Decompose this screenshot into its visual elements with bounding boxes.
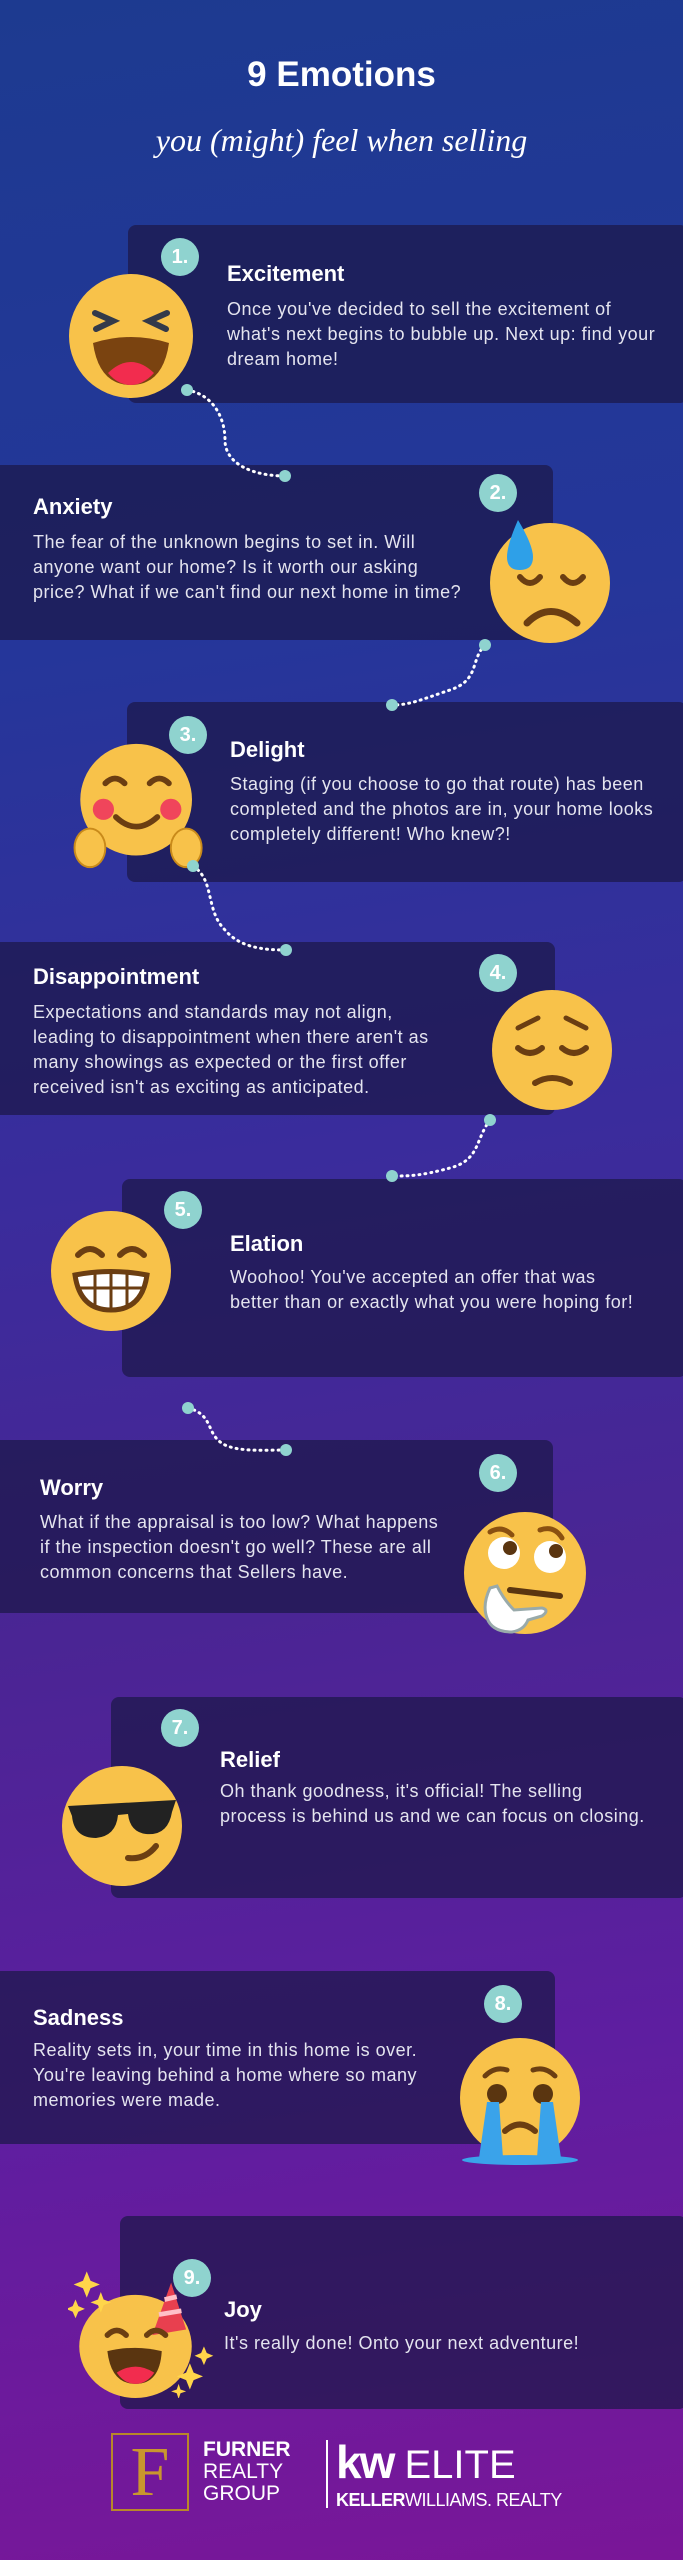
text: worry: if the inspection doesn't go well? These are all bbox=[40, 1537, 431, 1557]
text: sadness bbox=[33, 2040, 417, 2110]
text: excitement: Once you've decided to sell the excitement of bbox=[227, 299, 611, 319]
logo: Furner Realty Group: GROUP bbox=[203, 2482, 280, 2505]
badge 3 bbox=[169, 716, 207, 754]
text: excitement: dream home! bbox=[227, 349, 339, 369]
logo: Furner Realty Group: F bbox=[131, 2434, 169, 2511]
text: elation bbox=[230, 1267, 633, 1312]
icon: sunglasses face bbox=[62, 1766, 182, 1886]
title: 9 Emotions bbox=[247, 55, 436, 94]
badge 2: 2. bbox=[490, 482, 506, 504]
subtitle: you (might) feel when selling bbox=[156, 122, 527, 158]
text: delight bbox=[230, 774, 653, 844]
badge 6: 6. bbox=[490, 1462, 506, 1484]
panel: disappointment bbox=[0, 942, 555, 1115]
badge 6 bbox=[479, 1454, 517, 1492]
panel: worry bbox=[0, 1440, 553, 1613]
badge 1 bbox=[161, 238, 199, 276]
heading: Delight: Delight bbox=[230, 737, 305, 762]
icon: party face bbox=[68, 2272, 214, 2398]
heading: Elation: Elation bbox=[230, 1231, 303, 1256]
logo: KW Elite: kw ELITE bbox=[336, 2436, 516, 2488]
panel: relief bbox=[111, 1697, 683, 1898]
logo: KW Elite: KELLERWILLIAMS. REALTY bbox=[336, 2490, 562, 2510]
text: sadness: Reality sets in, your time in this home is over. bbox=[33, 2040, 417, 2060]
panel: excitement bbox=[128, 225, 683, 403]
icon: crying face bbox=[460, 2038, 580, 2165]
badge 9: 9. bbox=[184, 2267, 200, 2289]
panel: sadness bbox=[0, 1971, 555, 2144]
logo: Furner Realty Group: FURNER bbox=[203, 2438, 290, 2461]
text: delight: completely different! Who knew?! bbox=[230, 824, 511, 844]
badge 5 bbox=[164, 1191, 202, 1229]
logo: Furner Realty Group bbox=[111, 2433, 290, 2511]
icon: grinning face bbox=[51, 1211, 171, 1331]
logo: KW Elite bbox=[336, 2436, 562, 2510]
heading: Worry: Worry bbox=[40, 1475, 103, 1500]
heading: Relief: Relief bbox=[220, 1747, 280, 1772]
text: anxiety: The fear of the unknown begins to set in. Will bbox=[33, 532, 415, 552]
text: excitement bbox=[227, 299, 655, 369]
logo: Furner Realty Group: REALTY bbox=[203, 2460, 283, 2483]
text: delight: Staging (if you choose to go that route) has been bbox=[230, 774, 644, 794]
badge 4: 4. bbox=[490, 962, 506, 984]
heading: Disappointment: Disappointment bbox=[33, 964, 199, 989]
badge 9 bbox=[173, 2259, 211, 2297]
panel: anxiety bbox=[0, 465, 553, 640]
icon: delight face bbox=[74, 744, 203, 868]
text: delight: completed and the photos are in, your home looks bbox=[230, 799, 653, 819]
badge 3: 3. bbox=[180, 724, 196, 746]
text: elation: Woohoo! You've accepted an offer that was bbox=[230, 1267, 596, 1287]
text: anxiety: anyone want our home? Is it worth our asking bbox=[33, 557, 418, 577]
heading: Sadness: Sadness bbox=[33, 2005, 124, 2030]
icon: pensive face bbox=[492, 990, 612, 1110]
divider bbox=[326, 2440, 328, 2508]
badge 5: 5. bbox=[175, 1199, 191, 1221]
text: relief bbox=[220, 1781, 645, 1826]
text: excitement: what's next begins to bubble up. Next up: find your bbox=[227, 324, 655, 344]
icon: thinking face bbox=[464, 1512, 586, 1634]
text: worry: common concerns that Sellers have. bbox=[40, 1562, 348, 1582]
text: anxiety: price? What if we can't find our next home in time? bbox=[33, 582, 461, 602]
text: relief: Oh thank goodness, it's official! The selling bbox=[220, 1781, 582, 1801]
text: worry: What if the appraisal is too low? What happens bbox=[40, 1512, 438, 1532]
badge 7: 7. bbox=[172, 1717, 188, 1739]
badge 4 bbox=[479, 954, 517, 992]
badge 2 bbox=[479, 474, 517, 512]
text: relief: process is behind us and we can focus on closing. bbox=[220, 1806, 645, 1826]
icon: sweat face bbox=[490, 520, 610, 643]
badge 7 bbox=[161, 1709, 199, 1747]
text: disappointment: Expectations and standards may not align, bbox=[33, 1002, 393, 1022]
text: disappointment bbox=[33, 1002, 429, 1097]
text: worry bbox=[40, 1512, 438, 1582]
badge 1: 1. bbox=[172, 246, 188, 268]
badge 8: 8. bbox=[495, 1993, 511, 2015]
heading: Excitement: Excitement bbox=[227, 261, 344, 286]
text: sadness: memories were made. bbox=[33, 2090, 221, 2110]
text: disappointment: many showings as expected or the first offer bbox=[33, 1052, 407, 1072]
heading: Anxiety: Anxiety bbox=[33, 494, 112, 519]
badge 8 bbox=[484, 1985, 522, 2023]
panel: elation bbox=[122, 1179, 683, 1377]
text: disappointment: received isn't as exciting as anticipated. bbox=[33, 1077, 370, 1097]
text: joy: It's really done! Onto your next adventure! bbox=[224, 2333, 579, 2353]
text: anxiety bbox=[33, 532, 461, 602]
text: disappointment: leading to disappointment when there aren't as bbox=[33, 1027, 429, 1047]
heading: Joy: Joy bbox=[224, 2297, 262, 2322]
text: sadness: You're leaving behind a home where so many bbox=[33, 2065, 417, 2085]
panel: delight bbox=[127, 702, 683, 882]
text: elation: better than or exactly what you were hoping for! bbox=[230, 1292, 633, 1312]
icon: laughing face bbox=[69, 274, 193, 398]
panel: joy bbox=[120, 2216, 683, 2409]
